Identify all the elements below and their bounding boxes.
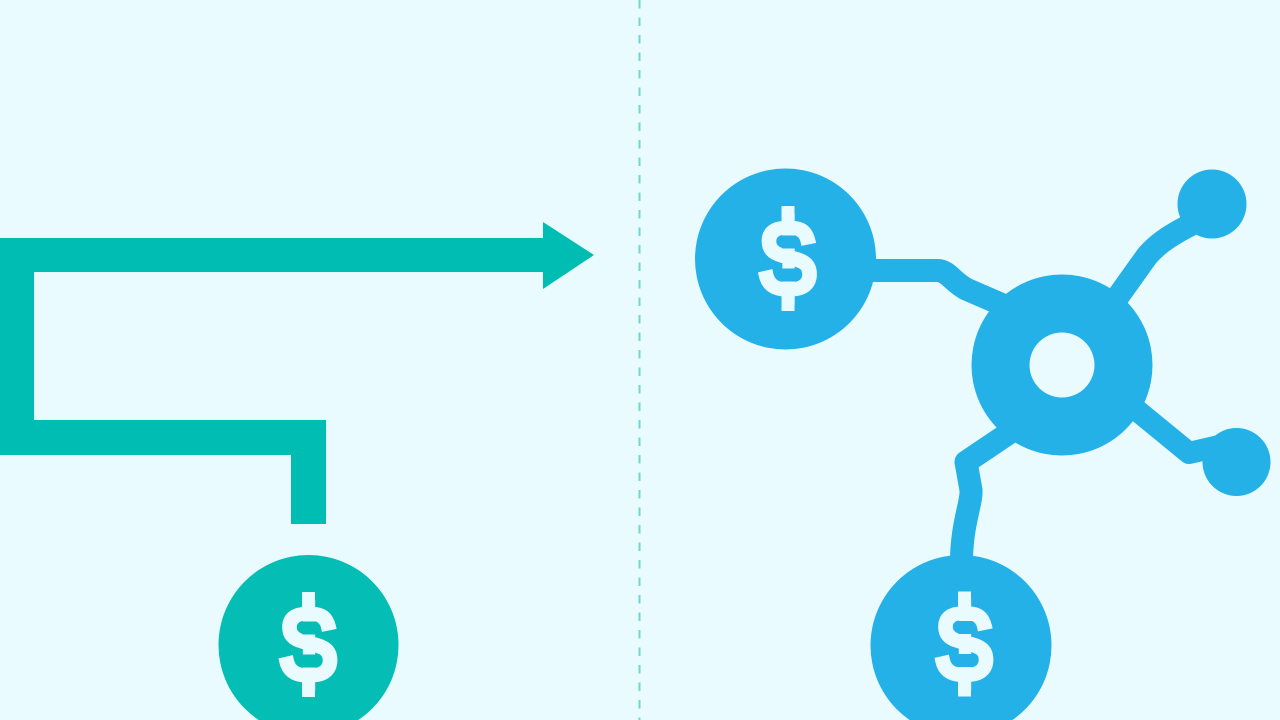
icon: top-right node — [1178, 170, 1246, 238]
icon: teal dollar coin — [218, 555, 398, 720]
network connectors — [860, 221, 1232, 565]
icon: central hub — [972, 274, 1152, 456]
panel: direct path — [0, 222, 594, 720]
icon: bottom dollar coin — [870, 555, 1052, 720]
panel: networked path — [695, 168, 1270, 720]
arrow: direct route — [0, 222, 594, 524]
icon: top-left dollar coin — [695, 168, 876, 350]
icon: teal dollar coin: $ — [281, 588, 336, 703]
icon: top-left dollar coin: $ — [761, 202, 815, 317]
icon: right node — [1202, 428, 1270, 496]
icon: bottom dollar coin: $ — [937, 587, 992, 703]
